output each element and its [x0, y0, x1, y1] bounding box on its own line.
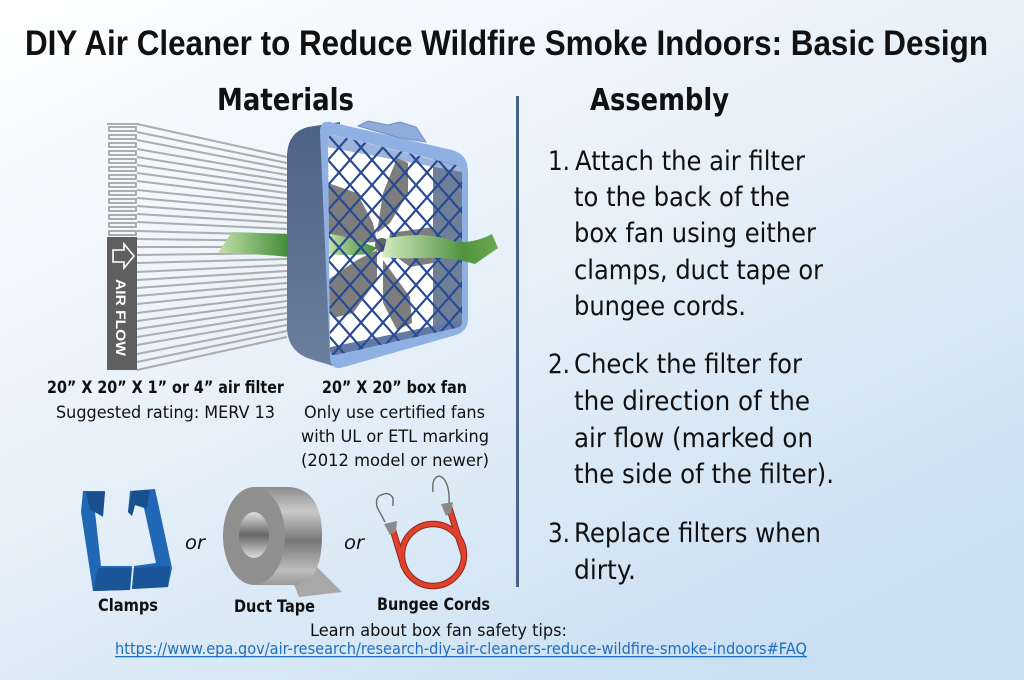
icon: clamps [81, 489, 172, 591]
step 1: bungee cords. [574, 291, 746, 322]
step 3 [548, 518, 821, 586]
fan caption: (2012 model or newer) [301, 451, 489, 471]
filter pleat lines [137, 124, 287, 370]
step 2 [548, 349, 834, 490]
step 1: clamps, duct tape or [574, 255, 824, 286]
safety tips link: https://www.epa.gov/air-research/research-diy-air-cleaners-reduce-wildfire-smoke-indoors#FAQ [115, 639, 807, 658]
heading: materials: Materials [217, 83, 354, 118]
fan caption [301, 378, 489, 471]
fan caption: 20” X 20” box fan [322, 378, 467, 397]
step 2: air flow (marked on [574, 423, 813, 454]
air filter [107, 124, 287, 370]
fan handle [358, 121, 426, 142]
icon: duct tape [223, 487, 342, 597]
fan blades [328, 158, 433, 330]
step 3: dirty. [574, 555, 636, 586]
step 3: 3. [548, 518, 570, 549]
fan side [287, 122, 340, 368]
air flow text: AIR FLOW [113, 279, 129, 357]
filter caption: 20” X 20” X 1” or 4” air filter [47, 378, 285, 397]
fan interior [328, 134, 462, 356]
fan frame [320, 122, 468, 368]
step 1: to the back of the [574, 182, 790, 213]
icon: air flow arrow [113, 244, 134, 268]
step 1: Attach the air filter [575, 146, 806, 177]
filter caption [47, 378, 285, 423]
divider [516, 96, 519, 587]
label: duct tape: Duct Tape [234, 597, 315, 616]
safety tips text: Learn about box fan safety tips: [310, 621, 567, 641]
green air arrow: outflow [382, 234, 498, 264]
step 1: box fan using either [574, 218, 817, 249]
fan grille [328, 136, 462, 355]
step 3: Replace filters when [574, 518, 821, 549]
step 1: 1. [548, 146, 570, 177]
box fan [287, 121, 470, 368]
air flow label panel [107, 237, 137, 370]
label: or: or [185, 532, 206, 554]
label: clamps: Clamps [98, 596, 158, 615]
label: or: or [344, 532, 365, 554]
label: bungee cords: Bungee Cords [377, 595, 490, 614]
green arrow through grille [328, 234, 377, 255]
fan caption: Only use certified fans [304, 403, 485, 423]
fan hub [375, 238, 386, 252]
fan caption: with UL or ETL marking [301, 427, 489, 447]
step 2: the side of the filter). [574, 459, 834, 490]
step 1 [548, 146, 824, 322]
icon: bungee cord [376, 476, 464, 586]
green air arrow: intake [218, 232, 290, 257]
filter caption: Suggested rating: MERV 13 [56, 403, 275, 423]
filter top folds [107, 124, 138, 235]
step 2: Check the filter for [574, 349, 803, 380]
heading: assembly: Assembly [590, 83, 729, 118]
step 2: 2. [548, 349, 570, 380]
step 2: the direction of the [574, 386, 810, 417]
